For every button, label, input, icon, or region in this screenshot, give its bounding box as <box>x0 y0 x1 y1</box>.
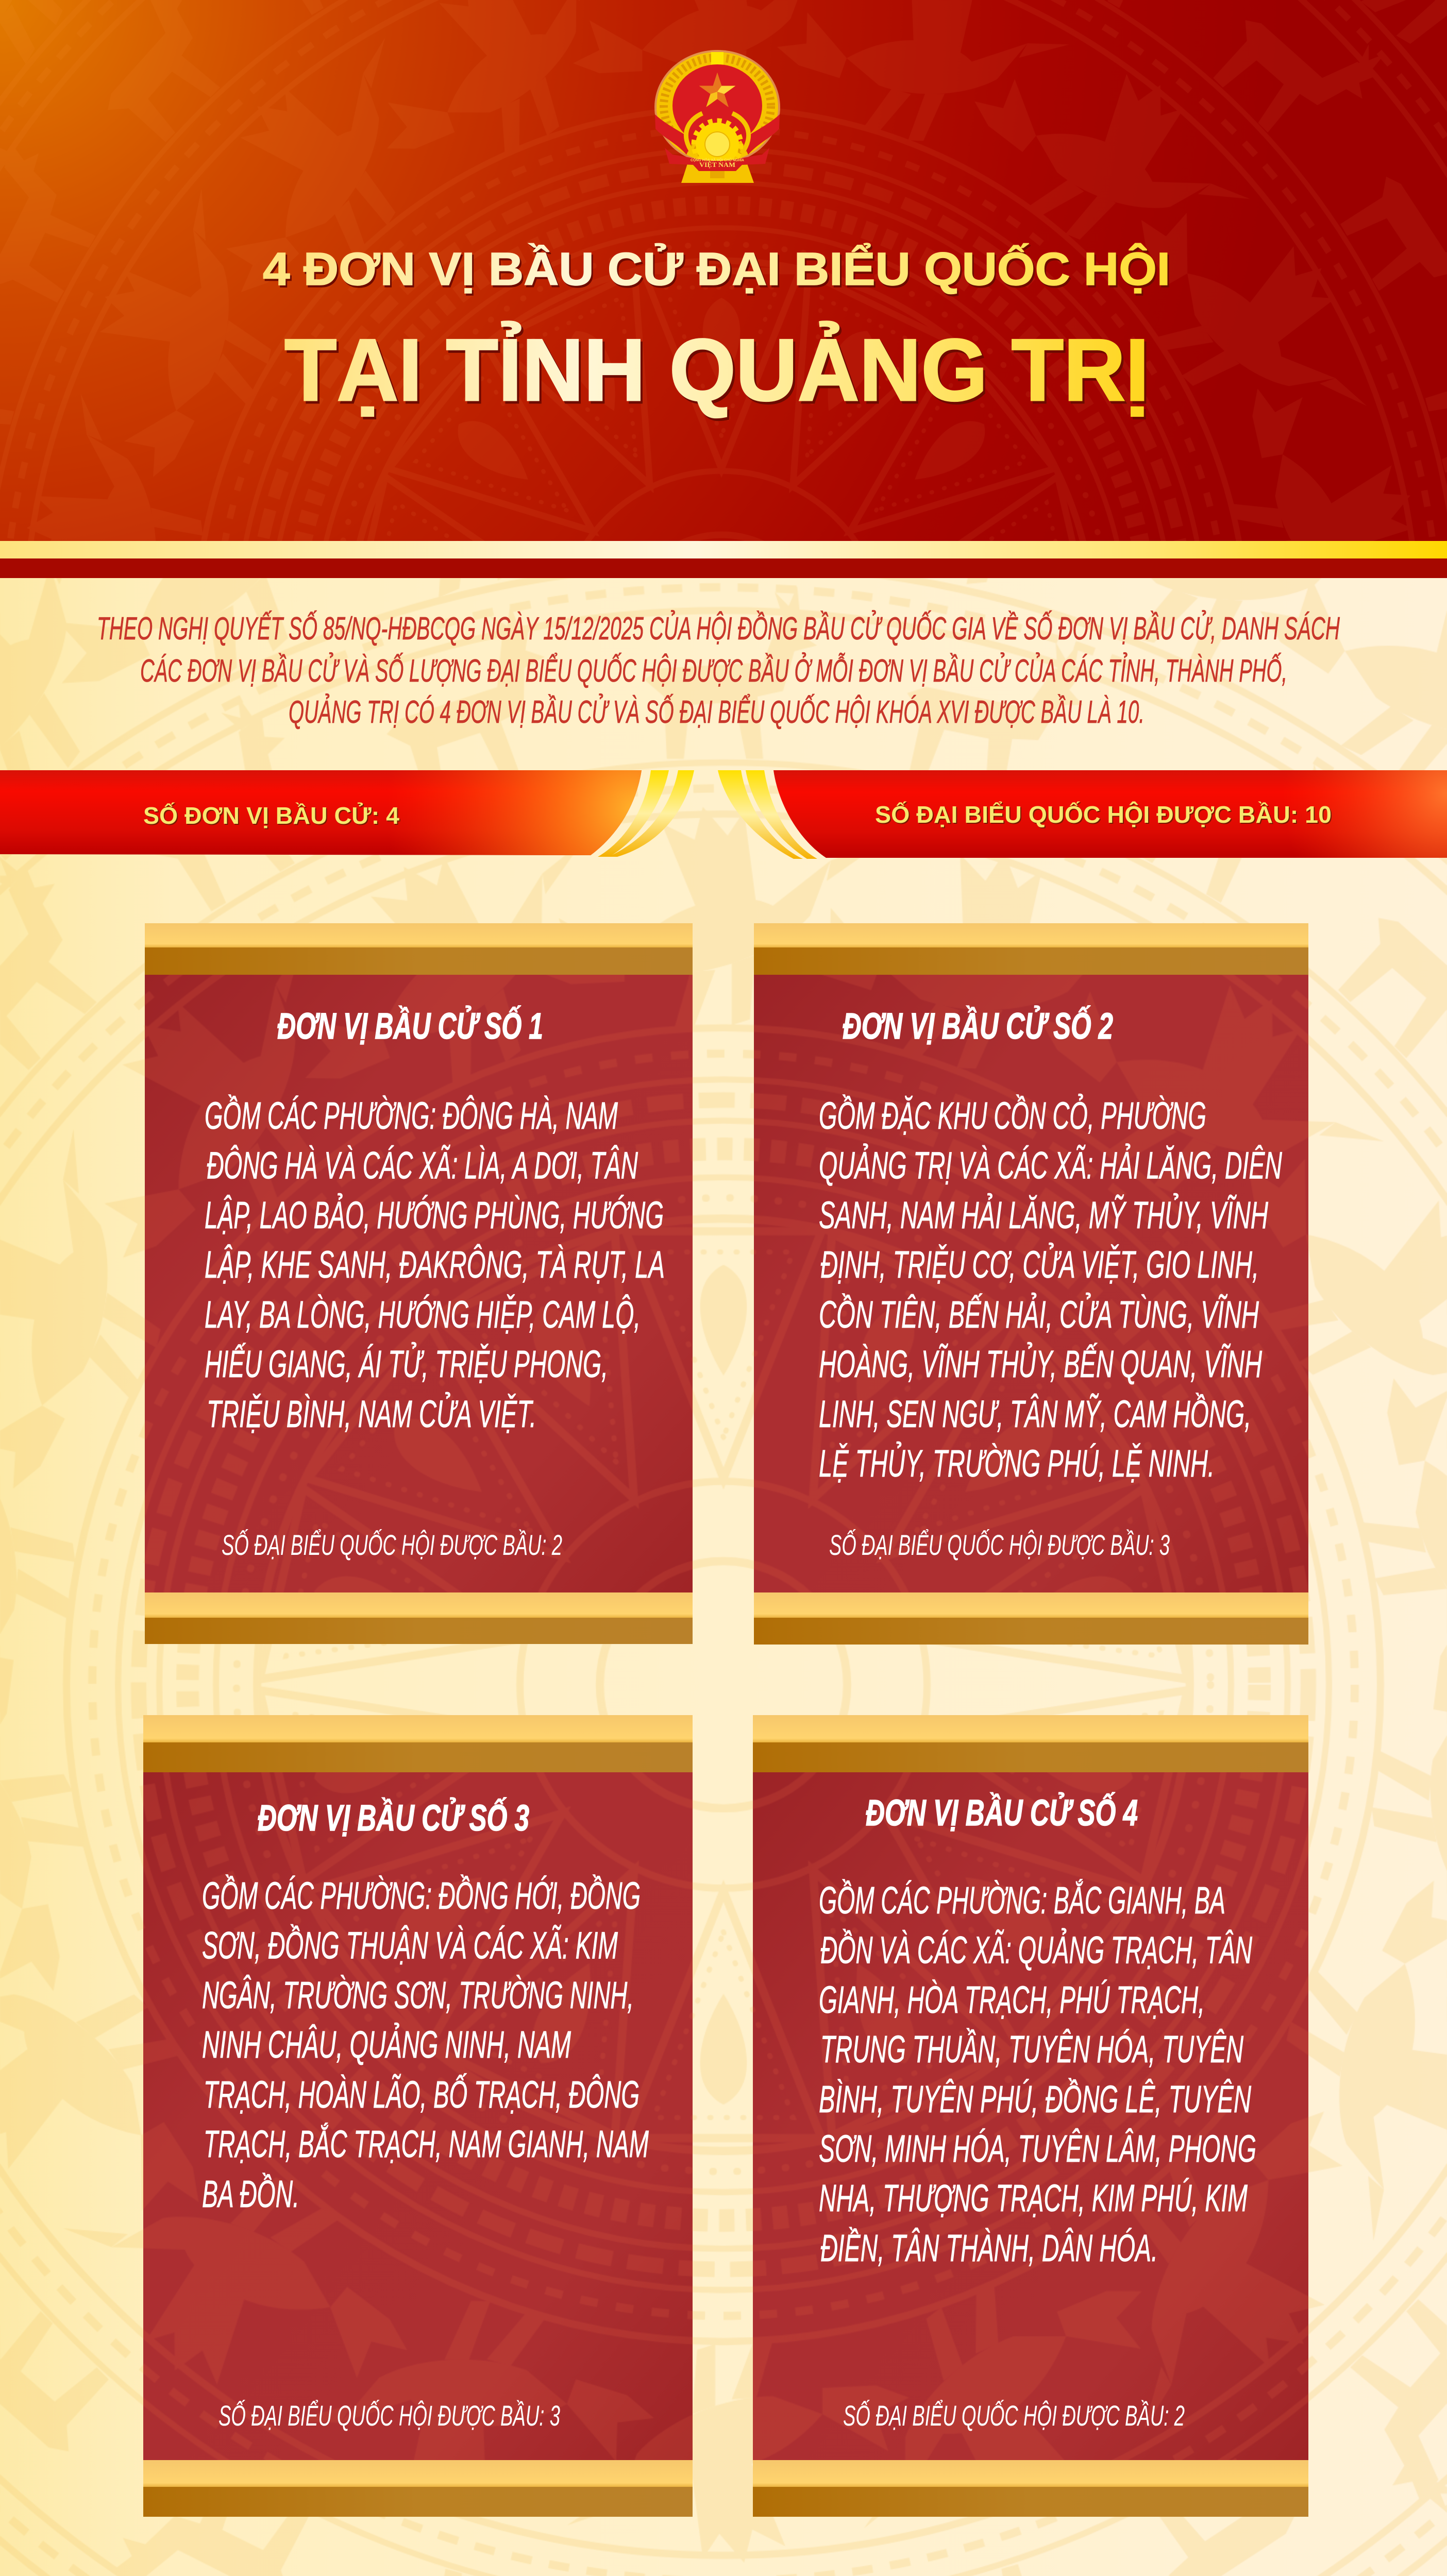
text: unit 1 <box>205 1006 665 1561</box>
body text: unit 1 <box>205 1094 665 1435</box>
body text: unit 4: ĐIỀN, TÂN THÀNH, DÂN HÓA. <box>820 2227 1158 2269</box>
body text: unit 3: GỒM CÁC PHƯỜNG: ĐỒNG HỚI, ĐỒNG <box>202 1874 641 1917</box>
body text: unit 3 <box>202 1874 649 2215</box>
body text: unit 3: SƠN, ĐỒNG THUẬN VÀ CÁC XÃ: KIM <box>202 1924 618 1967</box>
body text: unit 4: GIANH, HÒA TRẠCH, PHÚ TRẠCH, <box>819 1978 1205 2021</box>
panel: unit 1 <box>145 923 693 1644</box>
header banner <box>0 0 1447 541</box>
ribbon: number of electoral units <box>0 770 694 857</box>
body text: unit 1: LẬP, LAO BẢO, HƯỚNG PHÙNG, HƯỚNG <box>205 1193 664 1236</box>
body text: unit 2 <box>819 1094 1282 1485</box>
heading: unit 1: ĐƠN VỊ BẦU CỬ SỐ 1 <box>277 1006 543 1047</box>
text: unit 3 <box>202 1798 649 2432</box>
title line 2: TẠI TỈNH QUẢNG TRỊ <box>284 321 1149 419</box>
body text: unit 1: TRIỆU BÌNH, NAM CỬA VIỆT. <box>207 1392 536 1435</box>
body text: unit 2: GỒM ĐẶC KHU CỒN CỎ, PHƯỜNG <box>819 1094 1206 1137</box>
heading: unit 2: ĐƠN VỊ BẦU CỬ SỐ 2 <box>843 1006 1113 1047</box>
ribbon: number of electoral units: SỐ ĐƠN VỊ BẦU CỬ: 4 <box>143 802 399 829</box>
body text: unit 1: LẬP, KHE SANH, ĐAKRÔNG, TÀ RỤT, LA <box>205 1243 665 1286</box>
body text: unit 3: TRẠCH, BẮC TRẠCH, NAM GIANH, NAM <box>204 2123 649 2165</box>
icon: national emblem of Vietnam: CỘNG HÒA XÃ HỘI CHỦ NGHĨA <box>691 158 744 162</box>
body text: unit 1: LAY, BA LÒNG, HƯỚNG HIỆP, CAM LỘ, <box>205 1293 641 1336</box>
panel: unit 2 <box>754 923 1308 1645</box>
deputies count: unit 3: SỐ ĐẠI BIỂU QUỐC HỘI ĐƯỢC BẦU: 3 <box>218 2399 560 2432</box>
icon: national emblem of Vietnam: VIỆT NAM <box>699 161 735 168</box>
panel: unit 4 <box>753 1715 1308 2517</box>
body text: unit 3: NINH CHÂU, QUẢNG NINH, NAM <box>202 2023 571 2066</box>
body text: unit 1: GỒM CÁC PHƯỜNG: ĐÔNG HÀ, NAM <box>205 1094 618 1137</box>
text: unit 2 <box>819 1006 1282 1561</box>
heading: unit 3: ĐƠN VỊ BẦU CỬ SỐ 3 <box>258 1798 529 1839</box>
body text: unit 1: ĐÔNG HÀ VÀ CÁC XÃ: LÌA, A DƠI, TÂN <box>207 1144 638 1187</box>
body text: unit 2: LỆ THỦY, TRƯỜNG PHÚ, LỆ NINH. <box>819 1442 1215 1485</box>
panel: unit 3 <box>143 1715 693 2517</box>
deputies count: unit 1: SỐ ĐẠI BIỂU QUỐC HỘI ĐƯỢC BẦU: 2 <box>222 1529 562 1561</box>
body text: unit 3: TRẠCH, HOÀN LÃO, BỐ TRẠCH, ĐÔNG <box>204 2073 640 2116</box>
text: unit 4 <box>819 1792 1256 2432</box>
deputies count: unit 2: SỐ ĐẠI BIỂU QUỐC HỘI ĐƯỢC BẦU: 3 <box>829 1529 1170 1561</box>
icon: national emblem of Vietnam <box>654 50 780 183</box>
deputies count: unit 4: SỐ ĐẠI BIỂU QUỐC HỘI ĐƯỢC BẦU: 2 <box>843 2399 1185 2432</box>
intro text block <box>97 611 1340 730</box>
title line 1: 4 ĐƠN VỊ BẦU CỬ ĐẠI BIỂU QUỐC HỘI <box>263 243 1170 295</box>
body text: unit 3: BA ĐỒN. <box>202 2173 299 2215</box>
page background with bronze drum pattern <box>0 578 1447 2576</box>
body text: unit 3: NGÂN, TRƯỜNG SƠN, TRƯỜNG NINH, <box>202 1974 634 2016</box>
body text: unit 4 <box>819 1879 1256 2269</box>
ribbon: number of deputies <box>718 770 1447 859</box>
body text: unit 1: HIẾU GIANG, ÁI TỬ, TRIỆU PHONG, <box>205 1342 608 1385</box>
ribbon: number of deputies: SỐ ĐẠI BIỂU QUỐC HỘI ĐƯỢC BẦU: 10 <box>875 801 1332 828</box>
heading: unit 4: ĐƠN VỊ BẦU CỬ SỐ 4 <box>866 1792 1138 1834</box>
header bottom stripes <box>0 541 1447 578</box>
